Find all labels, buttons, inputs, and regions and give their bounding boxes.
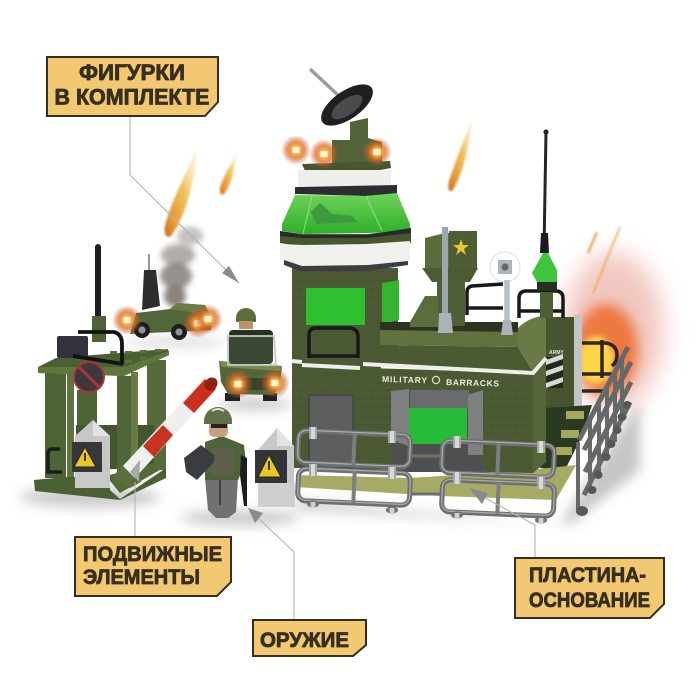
connector: figures label to driver (130, 117, 239, 283)
label: base plate: ОСНОВАНИЕ (529, 589, 650, 612)
entrance (391, 389, 483, 472)
jeep with gun (112, 254, 223, 340)
tower window bracket (309, 328, 358, 358)
white band (280, 241, 410, 266)
fence: side modules (576, 347, 631, 516)
meteor: left large (165, 147, 197, 237)
roof pipes (467, 284, 563, 318)
grey rod (442, 227, 448, 327)
driver figure (229, 308, 273, 364)
label: movable elements: ЭЛЕМЕНТЫ (83, 566, 200, 589)
control tower upper (280, 69, 411, 271)
label: figures included: В КОМПЛЕКТЕ (54, 84, 210, 110)
barrier arm (113, 375, 220, 488)
no-entry sign (74, 362, 104, 392)
roof antenna (544, 132, 546, 250)
soldier figure with weapon (184, 407, 247, 518)
upper deck (302, 161, 391, 171)
roof watch block (410, 129, 563, 335)
label: figures included: ФИГУРКИ (79, 60, 185, 85)
buggy with driver (219, 308, 290, 401)
guard post (34, 247, 220, 500)
bollard right (255, 428, 295, 507)
roof strip (380, 330, 518, 347)
label: base plate: ПЛАСТИНА- (529, 564, 646, 587)
door (309, 395, 353, 468)
grey gun block (184, 445, 214, 480)
radio box (57, 336, 88, 358)
searchlight (490, 252, 520, 335)
front facade (302, 366, 533, 473)
tower front window (306, 288, 365, 325)
label: base plate (515, 558, 664, 618)
sign text (382, 374, 500, 388)
green glass (282, 193, 410, 234)
antenna mast (310, 69, 340, 97)
face (209, 420, 228, 437)
label: figures included (47, 57, 218, 116)
sign text: MILITARY (382, 374, 428, 385)
drop shadows under the set (20, 338, 640, 525)
connector: movable elements (134, 482, 136, 536)
meteor: centre (448, 115, 473, 191)
antenna (95, 247, 101, 322)
rear wing (545, 317, 574, 408)
facade top wall (380, 345, 533, 372)
explosion behind the barracks (564, 227, 664, 408)
white stripe (292, 358, 546, 373)
label: weapon: ОРУЖИЕ (260, 629, 349, 652)
helmet (204, 407, 232, 424)
radio pipe (73, 332, 123, 364)
beacon lights (281, 135, 311, 165)
grey underside (284, 260, 408, 271)
torso (205, 436, 246, 480)
connector: base plate (469, 488, 535, 558)
tower side window (382, 280, 399, 324)
label: movable elements: ПОДВИЖНЫЕ (83, 543, 222, 566)
barrier pointer (130, 460, 140, 482)
smoke plume (160, 227, 203, 307)
roof plate (38, 349, 169, 376)
base plate (34, 468, 166, 500)
legs (205, 478, 238, 518)
rifle (240, 455, 247, 506)
connector: weapon (248, 508, 294, 620)
front base plate (296, 465, 576, 500)
barracks building (292, 268, 592, 500)
right corner block (518, 316, 546, 372)
back columns and wall (77, 390, 97, 430)
pipes in front of the explosion (582, 340, 617, 391)
rear base plate (540, 405, 592, 470)
sign text: BARRACKS (446, 377, 500, 388)
front columns (45, 372, 66, 478)
tower body (292, 268, 398, 468)
emblem text on rear wing: ARMY (549, 350, 564, 356)
label: weapon (253, 620, 366, 656)
fence feet (576, 401, 631, 516)
lower band (280, 229, 411, 247)
back roof (380, 322, 518, 332)
chevrons on rear wing (545, 357, 563, 388)
dark band (295, 185, 397, 196)
label: movable elements (75, 537, 231, 596)
fence: front modules (297, 427, 555, 524)
radar dish (314, 76, 380, 134)
radar mount (332, 118, 382, 163)
star (453, 239, 469, 255)
left pipe (48, 449, 62, 472)
meteor: left small (220, 152, 237, 195)
bollard left (72, 420, 110, 488)
